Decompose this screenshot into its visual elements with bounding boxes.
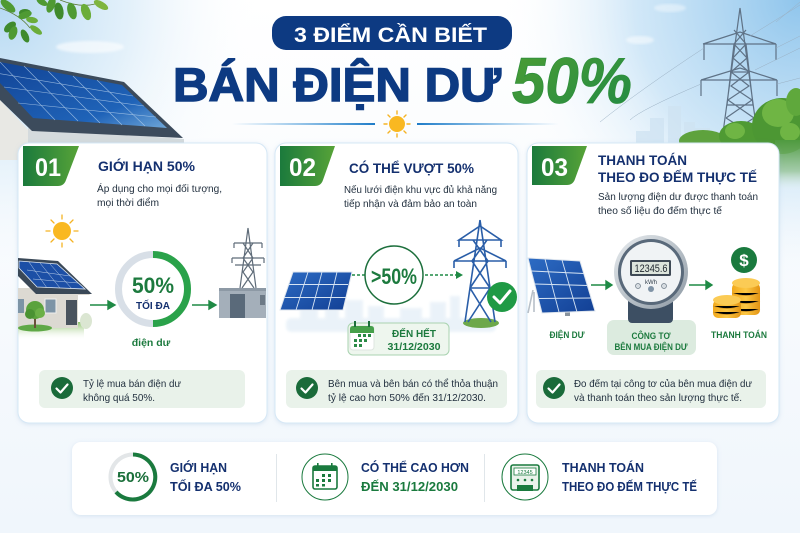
icon: electric meter: 12345.6 <box>634 263 668 275</box>
icon: coin stacks <box>713 278 760 318</box>
icon: power tower top right <box>600 2 800 140</box>
description 2 <box>344 184 497 210</box>
arrow <box>689 281 712 289</box>
callout 1: Tỷ lệ mua bán điện dư <box>83 378 181 390</box>
title: 50% <box>512 44 632 117</box>
description 2: Nếu lưới điện khu vực đủ khả năng <box>344 184 497 196</box>
icon: electric meter <box>614 235 688 323</box>
label: dien du: điện dư <box>132 337 171 349</box>
summary 1: TỐI ĐA 50% <box>170 479 241 494</box>
callout 1 <box>39 370 245 408</box>
dashed arrow <box>425 271 463 279</box>
badge: heading tag <box>272 16 512 50</box>
description 3: theo số liệu đo đếm thực tế <box>598 205 722 217</box>
description 3 <box>598 191 758 217</box>
badge 01: 01 <box>35 154 61 182</box>
icon: electric meter: kWh <box>645 280 657 286</box>
date tag: 31/12/2030 <box>388 341 441 353</box>
city backdrop <box>286 296 496 332</box>
callout 2: Bên mua và bên bán có thể thỏa thuận <box>328 378 498 390</box>
callout 3: Đo đếm tại công tơ của bên mua điện dư <box>574 378 752 390</box>
icon: solar panel <box>280 272 352 310</box>
badge 01 <box>23 146 79 186</box>
heading 2: CÓ THỂ VƯỢT 50% <box>349 159 475 176</box>
summary 1 <box>110 454 241 500</box>
circle: over 50 percent <box>365 246 423 304</box>
heading 1: GIỚI HẠN 50% <box>98 157 196 174</box>
icon: solar panel on stand <box>528 258 595 316</box>
icon: house with solar <box>18 258 92 340</box>
donut: 50 percent: 50% <box>132 273 174 298</box>
arrow <box>90 301 115 309</box>
solar roof <box>0 58 184 160</box>
icon: blue tower <box>454 220 506 328</box>
summary 1: GIỚI HẠN <box>170 460 227 475</box>
summary 2: CÓ THỂ CAO HƠN <box>361 460 469 475</box>
description 1: mọi thời điểm <box>97 197 159 209</box>
title <box>173 44 632 117</box>
title divider with sun <box>232 111 559 137</box>
callout 3 <box>536 370 766 408</box>
heading 3: THEO ĐO ĐẾM THỰC TẾ <box>598 169 757 185</box>
description 1 <box>97 182 222 209</box>
description 1: Áp dụng cho mọi đối tượng, <box>97 182 222 195</box>
heading 3: THANH TOÁN <box>598 152 687 168</box>
label: dien du: ĐIỆN DƯ <box>550 329 585 341</box>
date tag <box>348 321 449 355</box>
icon: leaves top left <box>0 0 110 44</box>
panel: card 1 <box>18 143 267 423</box>
date tag: ĐẾN HẾT <box>392 327 436 340</box>
badge: heading tag: 3 ĐIỂM CẦN BIẾT <box>294 24 487 47</box>
circle: over 50 percent: >50% <box>371 264 417 289</box>
trees top right <box>679 88 800 192</box>
callout 1: không quá 50%. <box>83 392 155 404</box>
badge 03 <box>532 146 587 185</box>
icon: dollar <box>731 247 757 273</box>
callout 2 <box>286 370 507 408</box>
icon: check badge <box>487 282 517 312</box>
summary 3: 12345 <box>517 470 533 476</box>
title: BÁN ĐIỆN DƯ <box>173 58 501 111</box>
callout 2: tỷ lệ cao hơn 50% đến 31/12/2030. <box>328 392 486 404</box>
description 2: tiếp nhận và đảm bảo an toàn <box>344 198 477 210</box>
summary 2: ĐẾN 31/12/2030 <box>361 479 458 494</box>
label box: cong to: CÔNG TƠ <box>632 330 671 342</box>
badge 02 <box>280 146 335 186</box>
icon: substation and tower <box>219 228 266 318</box>
heading 3 <box>598 152 757 185</box>
panel: card 2 <box>275 143 518 423</box>
city skyline top right <box>636 106 710 146</box>
dashed arrow <box>352 274 365 276</box>
badge 03: 03 <box>541 154 568 182</box>
arrow <box>591 281 612 289</box>
summary 3: THEO ĐO ĐẾM THỰC TẾ <box>562 479 697 494</box>
icon: dollar: $ <box>739 251 749 270</box>
summary 1: 50% <box>117 469 149 486</box>
callout 3: và thanh toán theo sản lượng thực tế. <box>574 392 742 404</box>
label box: cong to: BÊN MUA ĐIỆN DƯ <box>614 341 688 353</box>
panel: card 3 <box>527 143 779 423</box>
arrow <box>192 301 216 309</box>
summary band <box>72 442 717 515</box>
summary 3 <box>502 454 697 500</box>
summary 2 <box>302 454 469 500</box>
label: thanh toan: THANH TOÁN <box>711 330 767 341</box>
icon: sun <box>46 215 78 247</box>
donut: 50 percent: TỐI ĐA <box>136 298 170 312</box>
badge 02: 02 <box>289 154 316 182</box>
label box: cong to <box>607 320 696 355</box>
description 3: Sản lượng điện dư được thanh toán <box>598 191 758 203</box>
summary 3: THANH TOÁN <box>562 460 644 475</box>
donut: 50 percent <box>118 254 188 324</box>
